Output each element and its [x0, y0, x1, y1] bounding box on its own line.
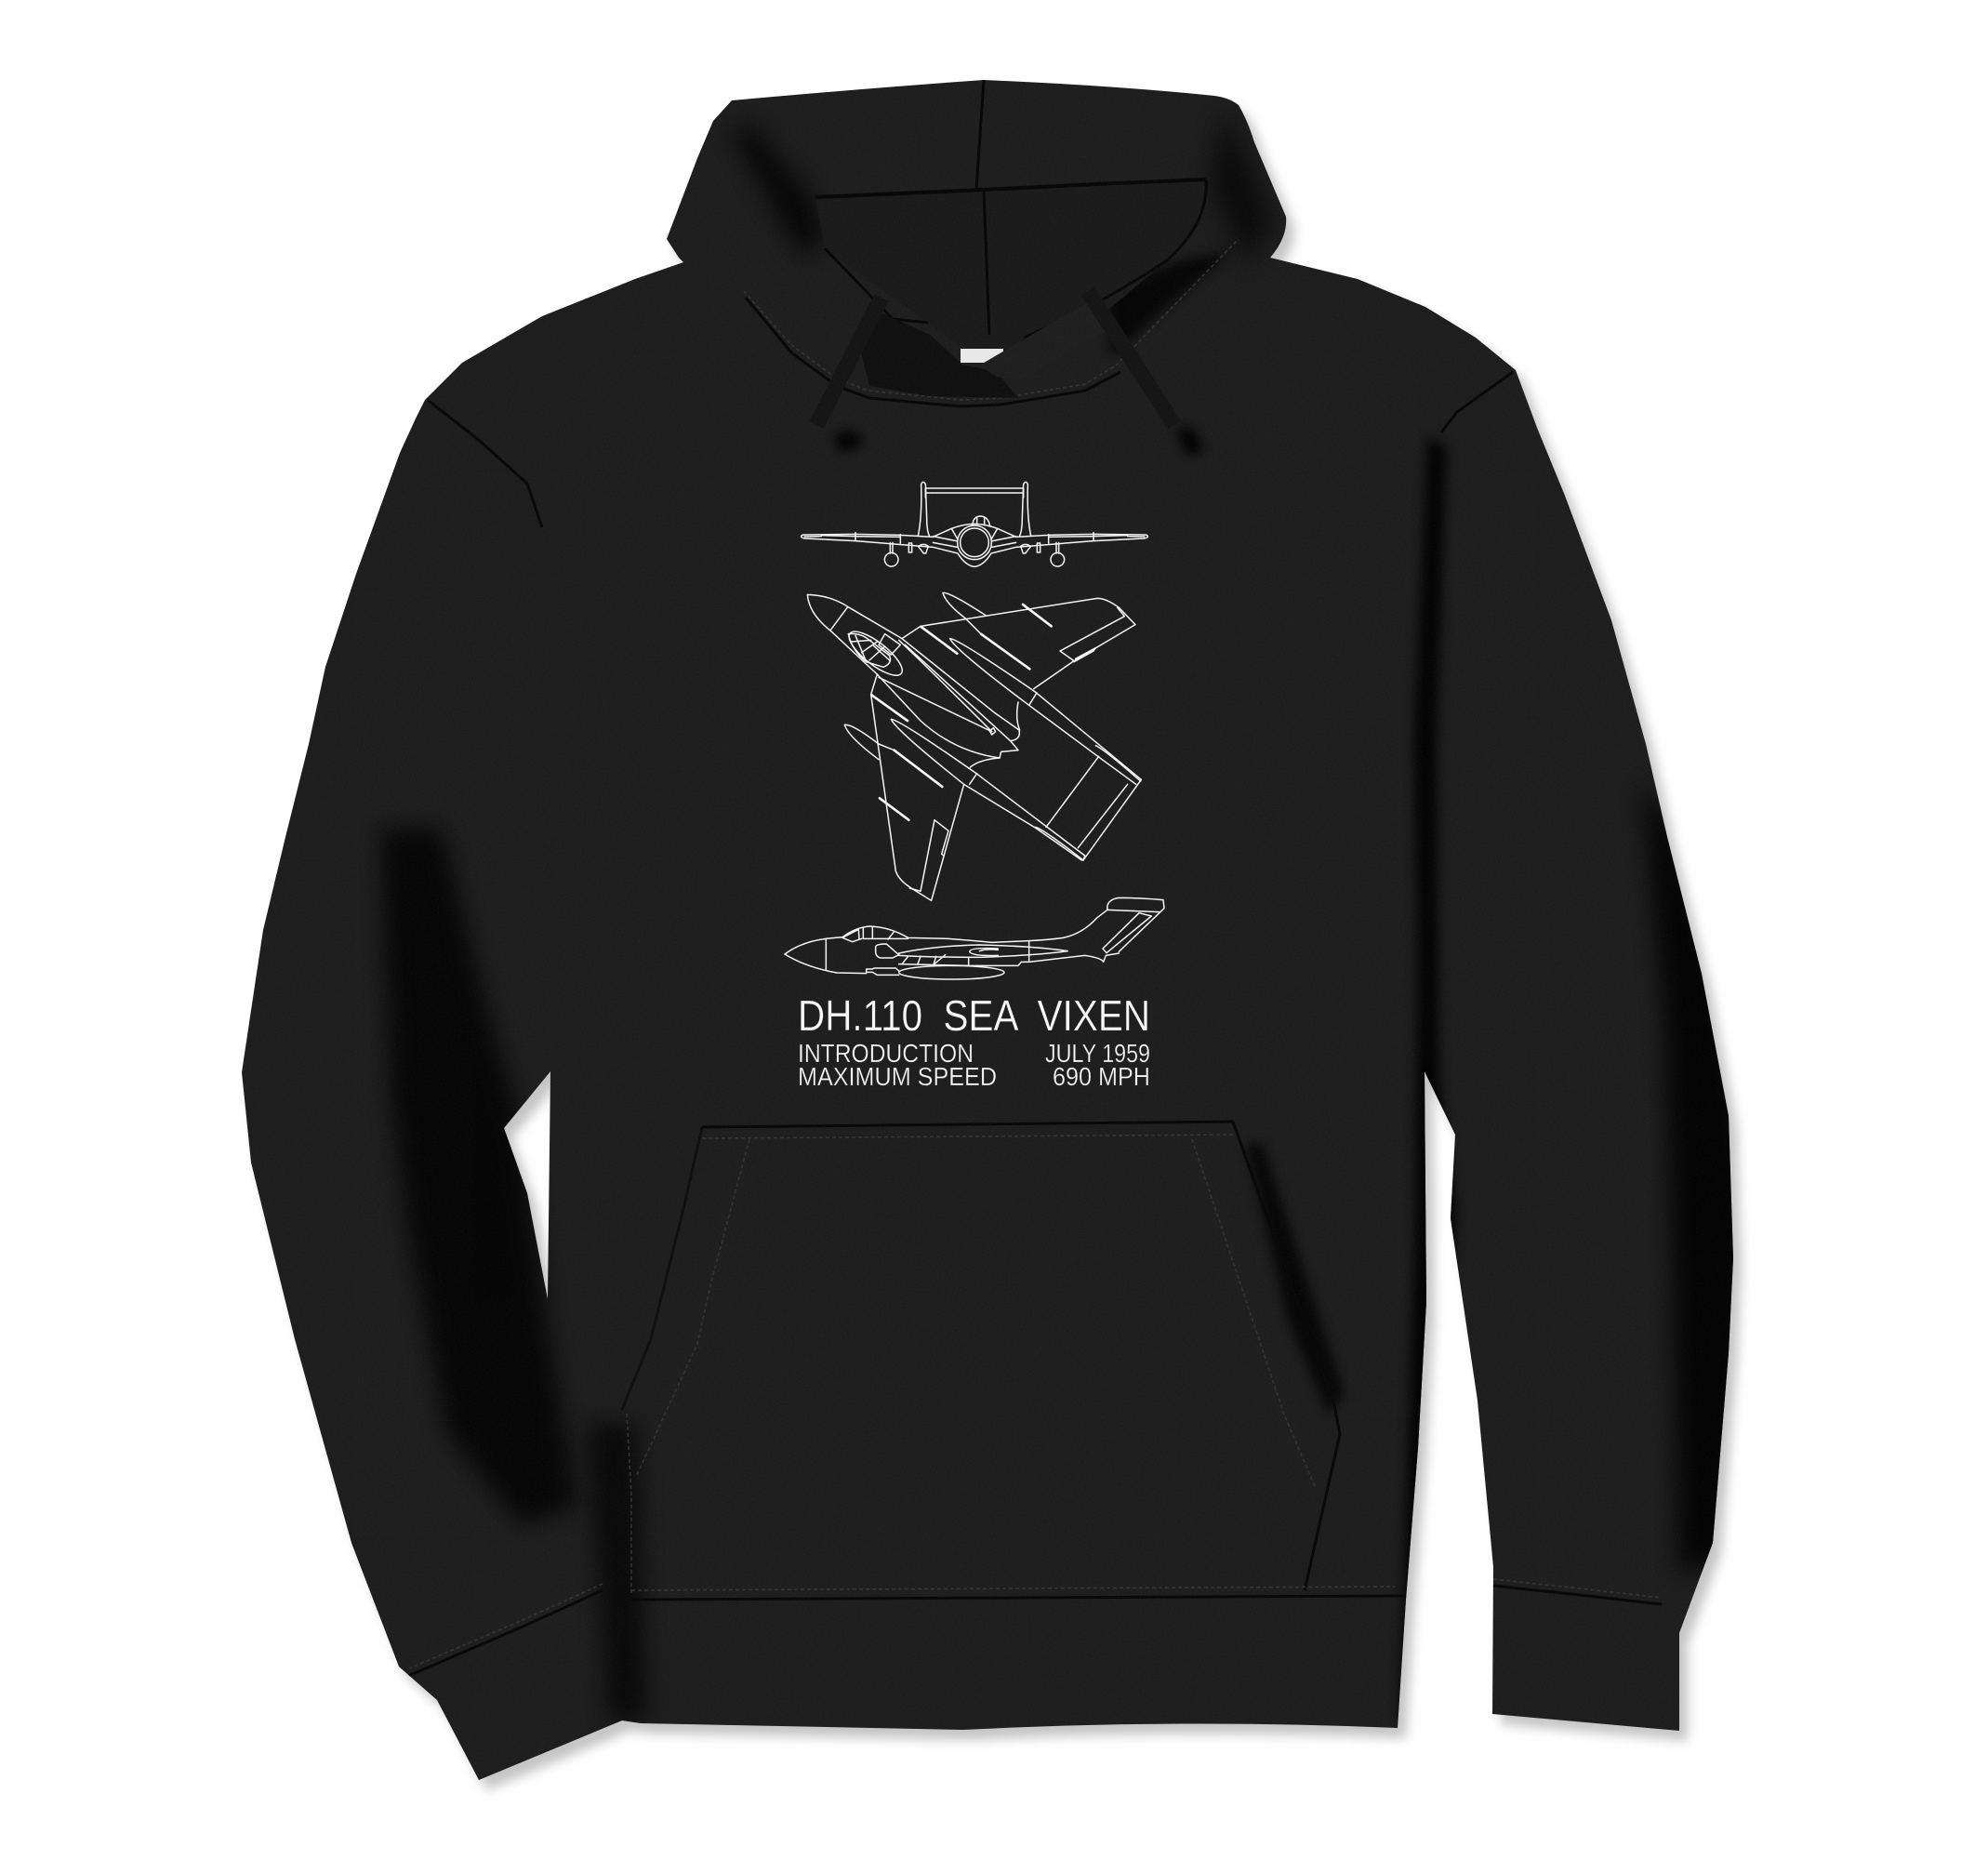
sleeve seams and pocket: [408, 372, 1662, 1676]
central fuselage: [902, 639, 1019, 767]
neck label: [961, 349, 1003, 363]
neck collar fold: [860, 312, 1018, 398]
fabric texture: [393, 169, 1666, 1641]
drawing: front view of aircraft: [802, 482, 1147, 566]
shading on sleeves and body: [381, 112, 1753, 1720]
spec: maximum speed label: MAXIMUM SPEED: [798, 1062, 997, 1091]
right drawstring: [1088, 291, 1174, 425]
starboard wing: [902, 598, 1135, 689]
port wing: [871, 674, 964, 900]
drawing: side view of aircraft: [785, 897, 1164, 979]
hood inner lining: [1107, 272, 1153, 309]
spec: introduction date: JULY 1959: [1045, 1039, 1150, 1068]
collar fold right: [984, 306, 1090, 378]
title: DH.110 SEA VIXEN: [798, 991, 1150, 1040]
nose and canopy: [807, 594, 902, 674]
garment base colour: [186, 56, 1785, 1804]
tail booms: [950, 639, 1141, 784]
hoodie product illustration: [242, 80, 1747, 1793]
spec: maximum speed value: 690 MPH: [1053, 1062, 1150, 1091]
hood seams: [744, 80, 1239, 406]
panel: hoodie garment: [186, 56, 1785, 1804]
tailplane: [1035, 746, 1141, 860]
drawing: top plan view of aircraft: [807, 592, 1141, 900]
soft drop shadow under hoodie: [250, 90, 1742, 1790]
missiles: [871, 604, 1052, 820]
drop tanks: [844, 592, 986, 760]
spec: introduction label: INTRODUCTION: [798, 1039, 974, 1068]
left drawstring: [816, 298, 881, 425]
